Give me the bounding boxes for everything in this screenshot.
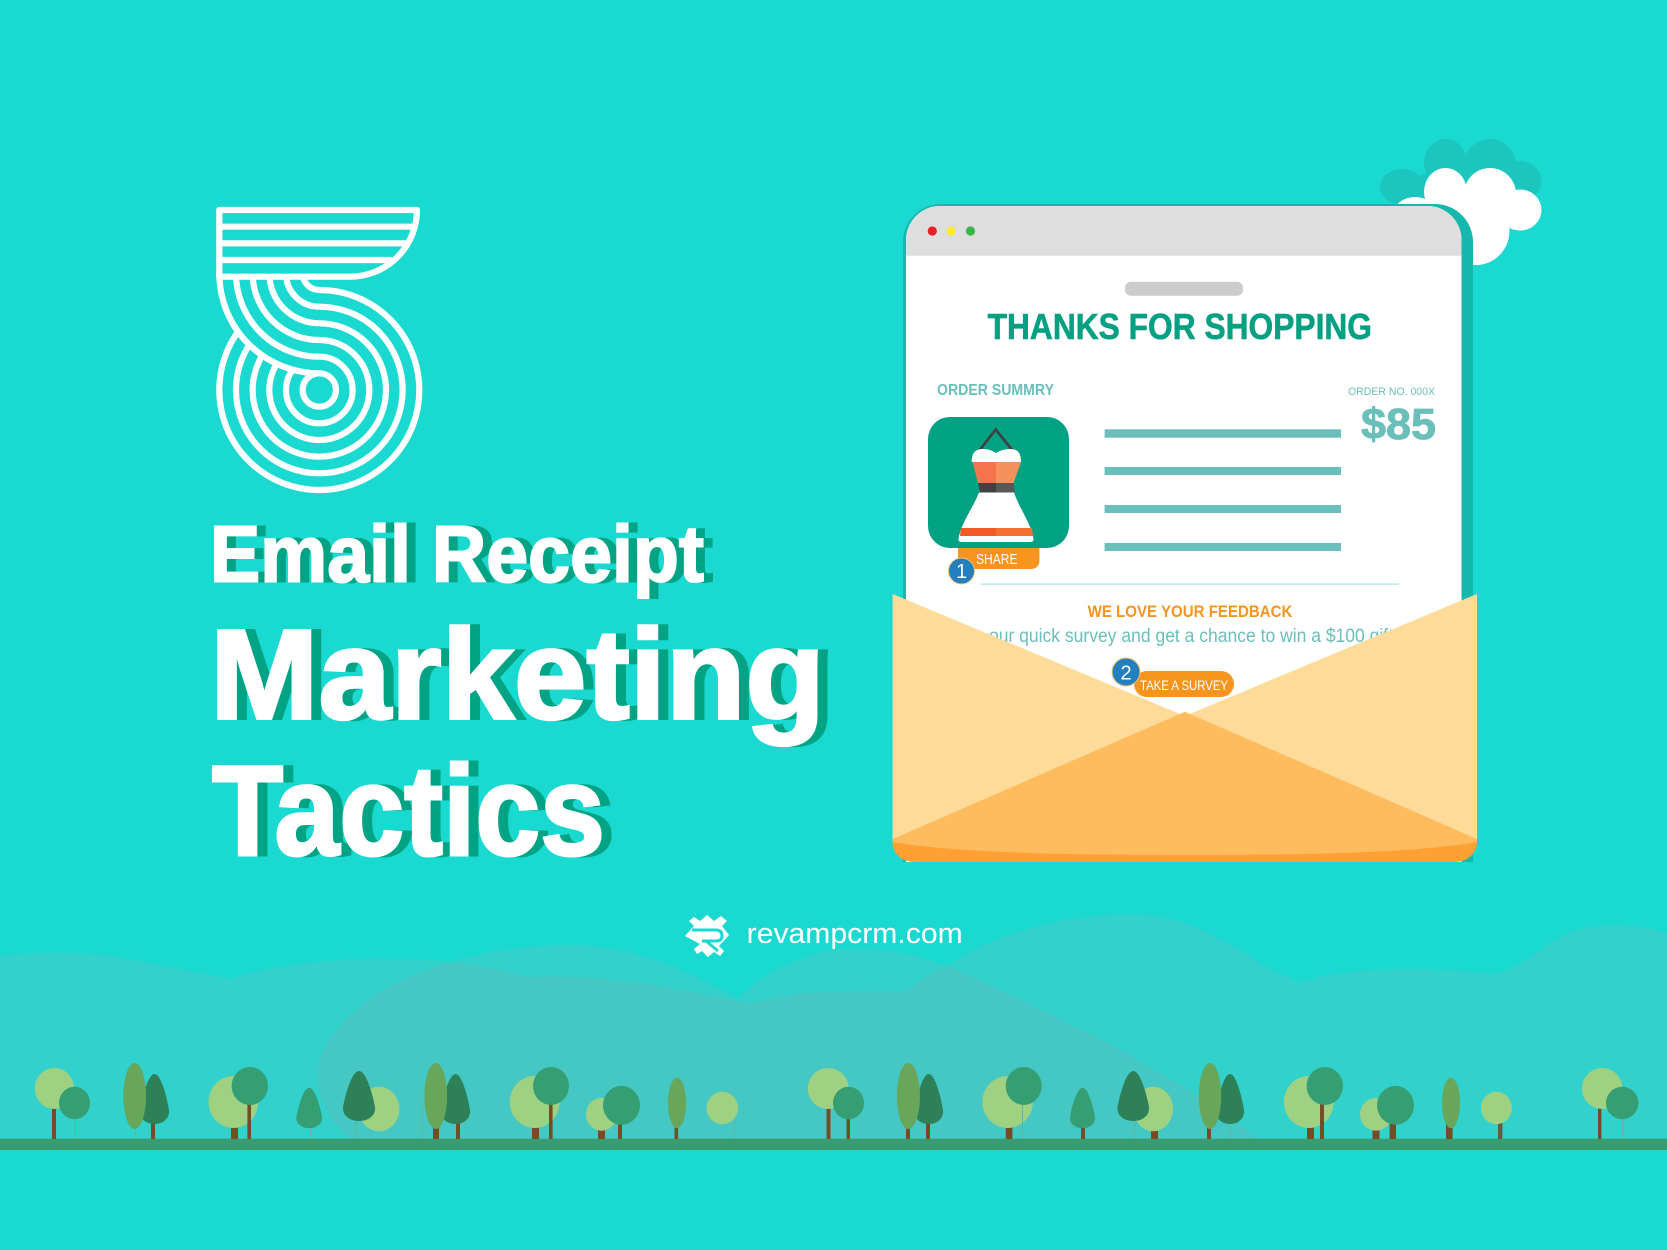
feedback heading: WE LOVE YOUR FEEDBACK <box>1088 602 1293 621</box>
step badge 2 <box>1112 658 1140 686</box>
title line: Email Receipt: Email Receipt <box>210 510 704 598</box>
tree 14 <box>1070 1088 1095 1139</box>
step badge 1: 1 <box>956 561 967 583</box>
tree group 8 <box>586 1086 640 1139</box>
tree group 2 <box>123 1063 169 1139</box>
forest of trees <box>35 1063 1638 1139</box>
envelope left flap <box>893 594 1477 842</box>
tree group 16 <box>1199 1063 1244 1139</box>
tree group 11 <box>808 1068 864 1139</box>
title line: Email Receipt: Email Receipt <box>219 510 713 598</box>
envelope bottom edge <box>893 842 1477 862</box>
window title bar <box>906 206 1462 256</box>
icon: dress <box>958 430 1034 542</box>
title line: Marketing: Marketing <box>210 604 825 746</box>
tree 20 <box>1481 1092 1512 1139</box>
envelope <box>893 594 1477 862</box>
ground strip <box>0 1139 1667 1150</box>
cloud: dark <box>1380 139 1542 212</box>
tree group 3 <box>208 1067 268 1139</box>
tree group 18 <box>1360 1086 1414 1139</box>
share button <box>958 548 1039 569</box>
tree group 21 <box>1582 1068 1638 1139</box>
envelope front flap <box>893 712 1477 856</box>
icon: large striped number 5 <box>219 210 419 490</box>
tree group 12 <box>897 1063 943 1139</box>
product tile <box>928 417 1069 548</box>
title line: Tactics: Tactics <box>212 740 605 883</box>
email browser window <box>903 204 1473 862</box>
tree group 13 <box>982 1067 1042 1139</box>
tree 9 <box>668 1078 686 1139</box>
tree 10 <box>706 1092 738 1139</box>
icon: revamp logo <box>685 915 729 957</box>
share button: SHARE <box>976 552 1018 568</box>
background hills <box>0 914 1667 1140</box>
survey button <box>1134 671 1234 697</box>
tree group 7 <box>510 1067 569 1139</box>
title text <box>210 510 835 883</box>
title line: Marketing: Marketing <box>220 604 835 746</box>
price: $85 <box>1361 400 1436 449</box>
feedback body text: our quick survey and get a chance to win a $100 gift <box>989 626 1394 647</box>
window buttons <box>928 226 975 236</box>
window frame <box>903 204 1473 862</box>
tree 19 <box>1442 1078 1460 1139</box>
tree group 1 <box>35 1068 90 1139</box>
order number: ORDER NO. 000X <box>1348 386 1436 398</box>
step badge 1 <box>948 558 974 584</box>
website url: revampcrm.com <box>747 918 963 950</box>
order summary label: ORDER SUMMRY <box>937 382 1054 399</box>
tree group 6 <box>424 1063 470 1139</box>
tree 4 <box>296 1088 322 1139</box>
tree group 5 <box>343 1071 423 1139</box>
email heading: THANKS FOR SHOPPING <box>988 306 1372 347</box>
divider <box>980 584 1399 585</box>
step badge 2: 2 <box>1120 662 1132 684</box>
brand logo and url <box>685 915 963 957</box>
window page <box>906 206 1462 862</box>
title line: Tactics: Tactics <box>222 740 615 883</box>
tree group 17 <box>1284 1067 1343 1139</box>
tree group 15 <box>1117 1071 1173 1139</box>
cloud: white <box>1393 168 1542 265</box>
order line items <box>1105 429 1341 551</box>
envelope right flap <box>893 594 1477 842</box>
clouds behind window <box>1380 139 1542 265</box>
survey button: TAKE A SURVEY <box>1140 677 1229 693</box>
logo placeholder pill <box>1125 282 1243 296</box>
